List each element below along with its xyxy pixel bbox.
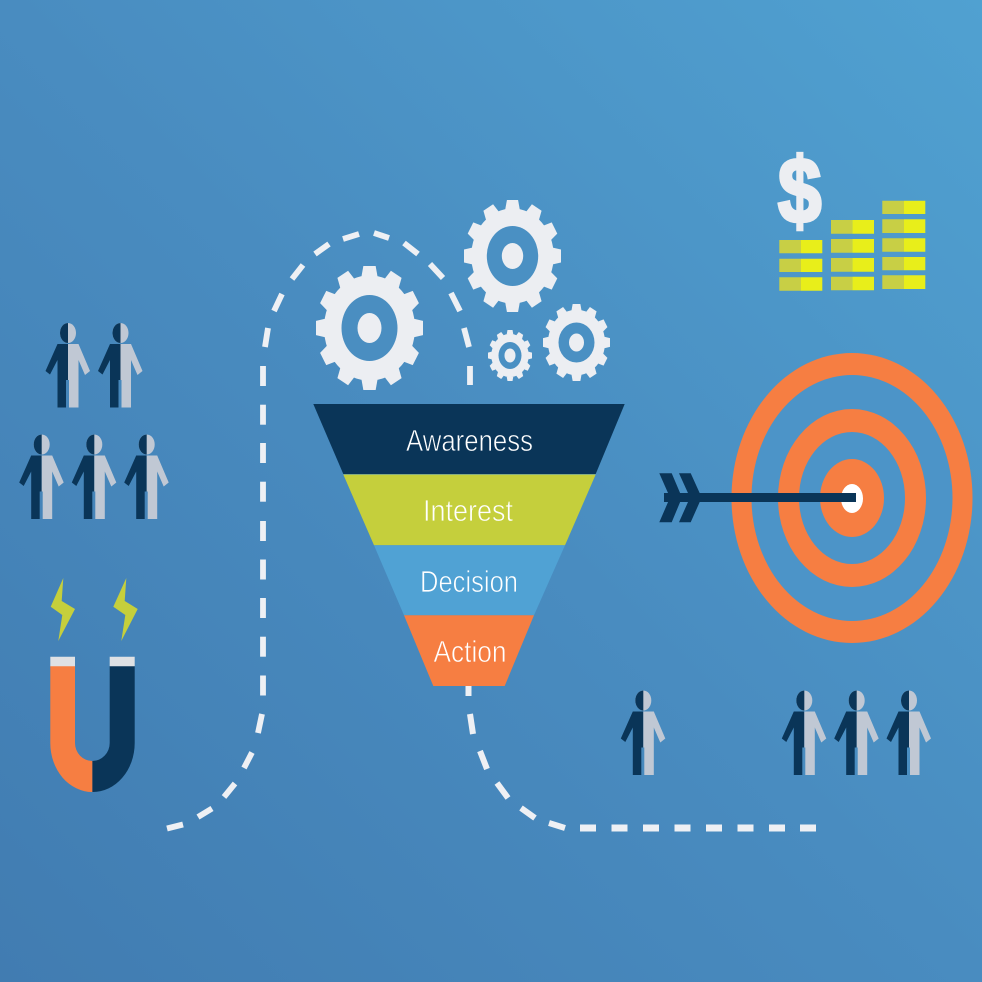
icon: dollar sign: $ (778, 139, 821, 243)
coin stack 3 (882, 201, 925, 289)
funnel stage: Awareness (313, 404, 625, 474)
dashed path: route out of funnel (468, 685, 816, 828)
funnel stage: Awareness: Awareness (406, 423, 533, 458)
magnet right half (92, 666, 135, 792)
icon: arrow (659, 473, 856, 522)
icon: target (732, 353, 972, 643)
funnel stage: Interest: Interest (423, 493, 513, 528)
funnel stage: Interest (343, 474, 596, 545)
magnet caps (50, 657, 135, 666)
icon: people group, bottom right (782, 690, 931, 775)
icon: single person, bottom (621, 690, 665, 775)
icon: medium gear (543, 304, 610, 381)
funnel stage: Action: Action (434, 634, 506, 669)
bar chart: coin stacks (779, 201, 925, 291)
magnet left half (50, 666, 92, 792)
icon: lightning bolts (51, 578, 138, 641)
icon: large gear (316, 266, 423, 390)
icon: magnet with lightning bolts (50, 578, 138, 792)
icon: people group, top left (19, 323, 169, 519)
coin stack 2 (831, 220, 874, 290)
dashed path: left route into funnel (167, 233, 470, 828)
funnel stage: Action (404, 615, 534, 686)
funnel chart (313, 404, 625, 686)
funnel stage: Decision: Decision (420, 564, 518, 599)
coin stack 1 (779, 240, 822, 291)
icon: top gear (464, 200, 561, 312)
funnel stage: Decision (374, 545, 565, 615)
icon: small gear (488, 330, 532, 381)
